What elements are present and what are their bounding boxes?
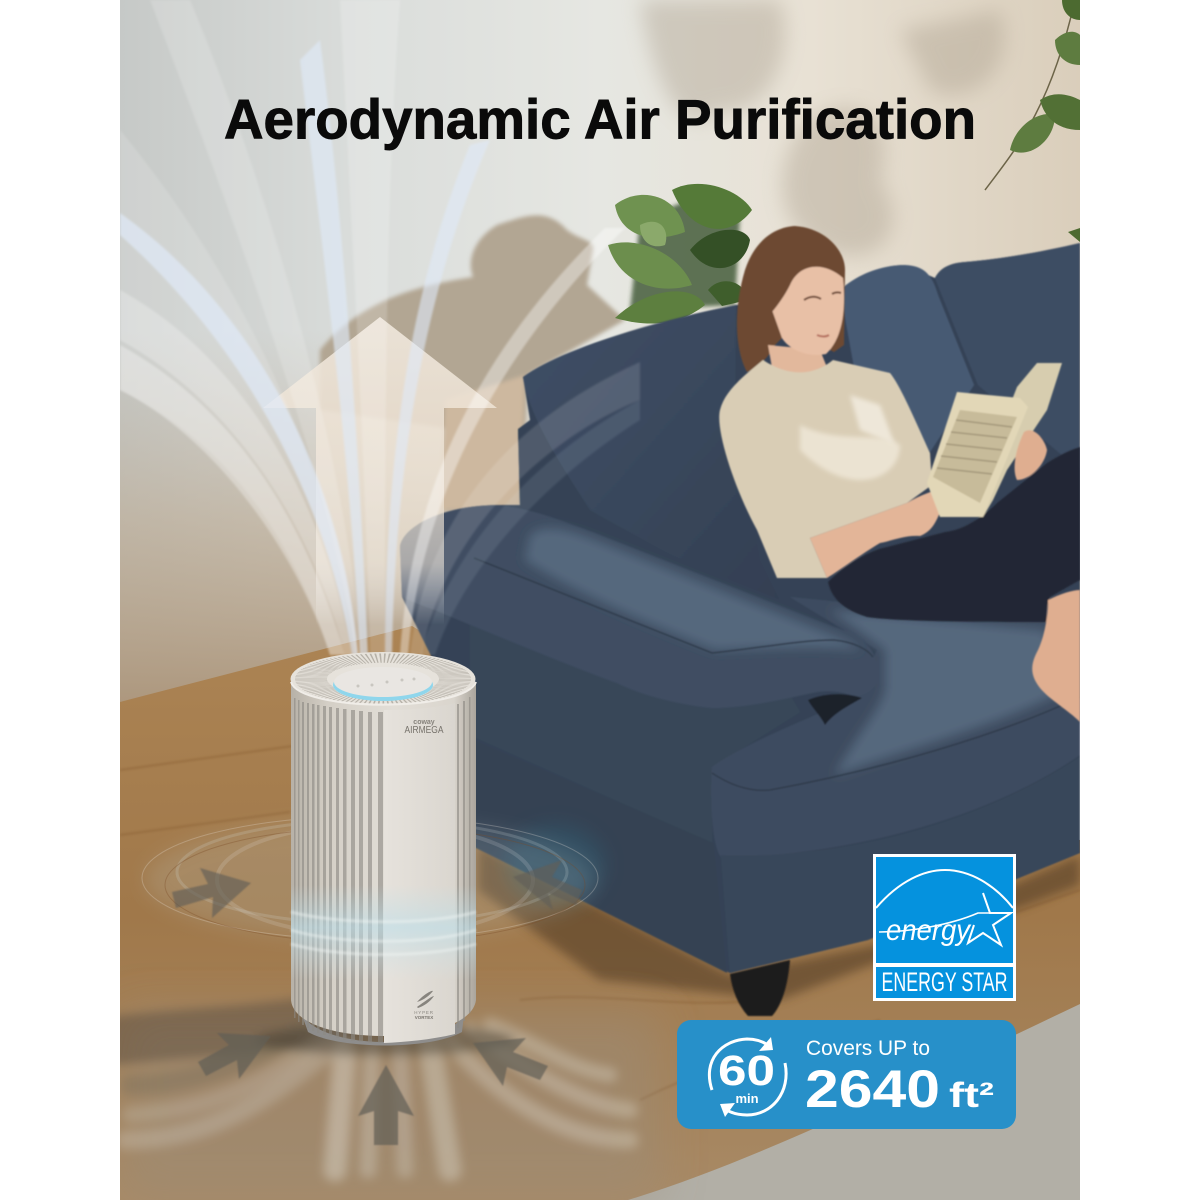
base [302,1015,464,1046]
energy star badge [873,854,1016,1001]
intake arrows [172,860,582,1145]
sofa foot [730,960,790,1016]
sofa back middle cushion [840,265,974,452]
bare foot [1032,590,1080,722]
seat lit top [830,610,1070,775]
vortex band [291,885,476,980]
sofa front base [721,757,1080,973]
sofa left side panel [518,434,520,504]
arrow: lower centre intake [358,1065,414,1145]
top vent grille [290,652,476,706]
hyper vortex logo: HYPER [414,1010,434,1015]
seat cushion [711,597,1080,858]
brand wordmark [404,719,444,736]
blouse [719,360,932,578]
book front page [927,392,1028,517]
neck and chest [767,344,827,374]
plant shadow on wall [318,213,626,428]
front panel [384,703,455,1043]
seat piping [712,706,1060,791]
arrow: upper left intake [172,868,251,918]
floor airflow streaks [120,1010,660,1200]
floor vortex rings [142,816,605,943]
blue glow ring [333,669,433,701]
hyper vortex logo [414,991,434,1020]
hyper vortex logo: VORTEX [415,1015,433,1020]
photo scene [120,0,1080,1200]
armrest piping [474,558,873,657]
arrow: lower right intake [473,1038,548,1086]
arrow: lower left intake [198,1033,271,1079]
sofa back right cushion [935,243,1080,470]
icon: 60 minute cycle: 60 [718,1047,775,1095]
icon: 60 minute cycle [709,1037,786,1117]
ribs [294,697,470,1043]
brand wordmark: AIRMEGA [404,725,444,736]
blouse highlights [800,425,900,480]
large upward arrow [263,317,497,625]
airflow fan petals [120,0,640,655]
right hand [1015,430,1047,480]
control disc [334,667,432,697]
infographic canvas [120,0,1080,1200]
brand wordmark: coway [413,719,435,726]
body [291,682,476,1036]
eye and mouth [804,292,841,336]
arm notch shadow [808,694,862,725]
energy star badge: ENERGY STAR [882,967,1008,997]
book back page [983,363,1062,517]
sofa silhouette underlay [400,243,1080,973]
hair [737,226,845,372]
armrest lit top [525,528,860,650]
energy star badge: energy [886,914,972,947]
wood floor [120,626,1080,1200]
air purifier [290,652,476,1046]
armrest roll [400,505,878,708]
arrow: upper right intake [513,860,582,910]
sofa back left cushion [524,307,734,495]
face [772,262,844,355]
woman reading [719,226,1080,722]
coverage text: ft² [949,1076,994,1115]
area rug [628,1004,1080,1200]
under-roll arm front [470,620,800,843]
coverage text: Covers UP to [806,1036,930,1060]
forearm and hand [810,491,940,578]
coverage text [805,1036,994,1119]
coverage badge [677,1020,1016,1129]
coverage text: 2640 [805,1060,940,1119]
title: Aerodynamic Air Purification [224,88,976,150]
sofa lower side panel [504,862,728,974]
plant behind sofa [608,184,752,324]
upper-right hanging plant [985,0,1080,242]
wall background [120,0,1080,720]
icon: 60 minute cycle: min [735,1091,759,1106]
sofa [400,243,1080,1016]
trousers [828,447,1080,622]
hair parting over forehead [771,260,844,312]
